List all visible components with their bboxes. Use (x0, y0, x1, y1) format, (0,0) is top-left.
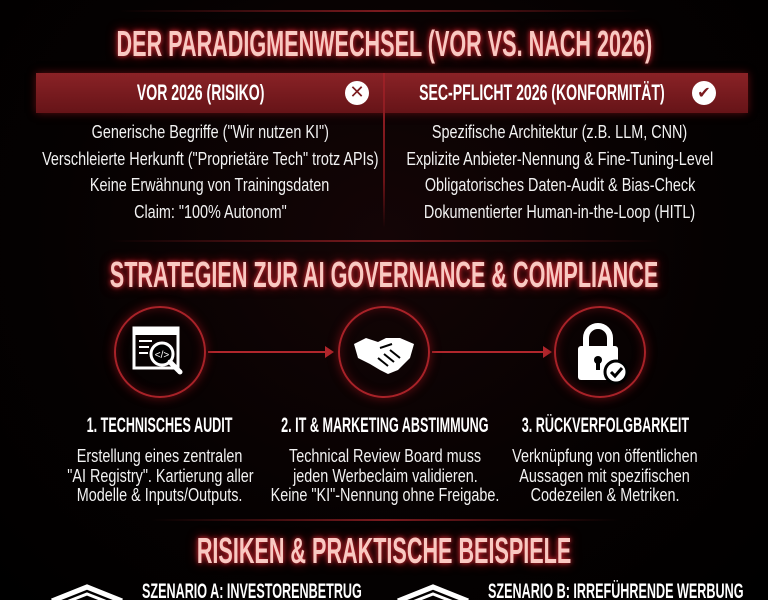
step 1: technical audit (67, 414, 254, 505)
step 3: traceability: 3. RÜCKVERFOLGBARKEIT (521, 414, 689, 437)
list: SEC 2026: Dokumentierter Human-in-the-Loop (HITL) (424, 202, 696, 222)
list: before 2026 (42, 122, 378, 222)
icon: shield A (51, 584, 123, 600)
icon: code audit (114, 306, 206, 398)
step 1: technical audit: Erstellung eines zentralen (77, 446, 243, 466)
list: SEC 2026 (407, 122, 713, 222)
step 1: technical audit: 1. TECHNISCHES AUDIT (87, 414, 233, 437)
step 2: IT & marketing: jeden Werbeclaim validieren. (293, 466, 477, 486)
step 3: traceability: Aussagen mit spezifischen (520, 466, 690, 486)
list: before 2026: Claim: "100% Autonom" (134, 202, 286, 222)
table header bar (36, 73, 748, 113)
list: SEC 2026: Explizite Anbieter-Nennung & Fine-Tuning-Level (407, 148, 713, 168)
step 2: IT & marketing: Keine "KI"-Nennung ohne Freigabe. (271, 485, 499, 505)
step 2: IT & marketing: Technical Review Board muss (289, 446, 481, 466)
header: before 2026: VOR 2026 (RISIKO) (137, 80, 265, 105)
icon: lock with check (554, 306, 646, 398)
icon: x mark (345, 81, 369, 105)
icon: check mark (692, 81, 716, 105)
step 2: IT & marketing: 2. IT & MARKETING ABSTIMMUNG (281, 414, 489, 437)
step 1: technical audit: "AI Registry". Kartierung aller (67, 466, 253, 486)
icon: shield B (397, 584, 469, 600)
title: risks: RISIKEN & PRAKTISCHE BEISPIELE (197, 530, 571, 571)
step 1: technical audit: Modelle & Inputs/Outputs. (77, 485, 243, 505)
icon: handshake (338, 306, 430, 398)
step 2: IT & marketing (271, 414, 499, 505)
arrow 2 (432, 351, 550, 353)
list: before 2026: Generische Begriffe ("Wir nutzen KI") (91, 122, 329, 142)
step 3: traceability (512, 414, 698, 505)
list: SEC 2026: Obligatorisches Daten-Audit & Bias-Check (425, 175, 695, 195)
list: before 2026: Verschleierte Herkunft ("Proprietäre Tech" trotz APIs) (42, 148, 378, 168)
icon: check mark: ✔ (697, 83, 711, 102)
icon: code audit: </> (155, 350, 169, 361)
arrow 1 (208, 351, 332, 353)
step 3: traceability: Verknüpfung von öffentlichen (512, 446, 698, 466)
title: paradigm shift: DER PARADIGMENWECHSEL (VOR VS. NACH 2026) (116, 23, 652, 64)
step 3: traceability: Codezeilen & Metriken. (531, 485, 679, 505)
icon: x mark: ✕ (349, 82, 365, 103)
panel: comparison table (31, 68, 753, 224)
list: SEC 2026: Spezifische Architektur (z.B. LLM, CNN) (432, 122, 688, 142)
header: SEC 2026: SEC-PFLICHT 2026 (KONFORMITÄT) (419, 80, 665, 105)
list: before 2026: Keine Erwähnung von Trainingsdaten (90, 175, 330, 195)
title: strategies: STRATEGIEN ZUR AI GOVERNANCE & COMPLIANCE (110, 254, 658, 295)
